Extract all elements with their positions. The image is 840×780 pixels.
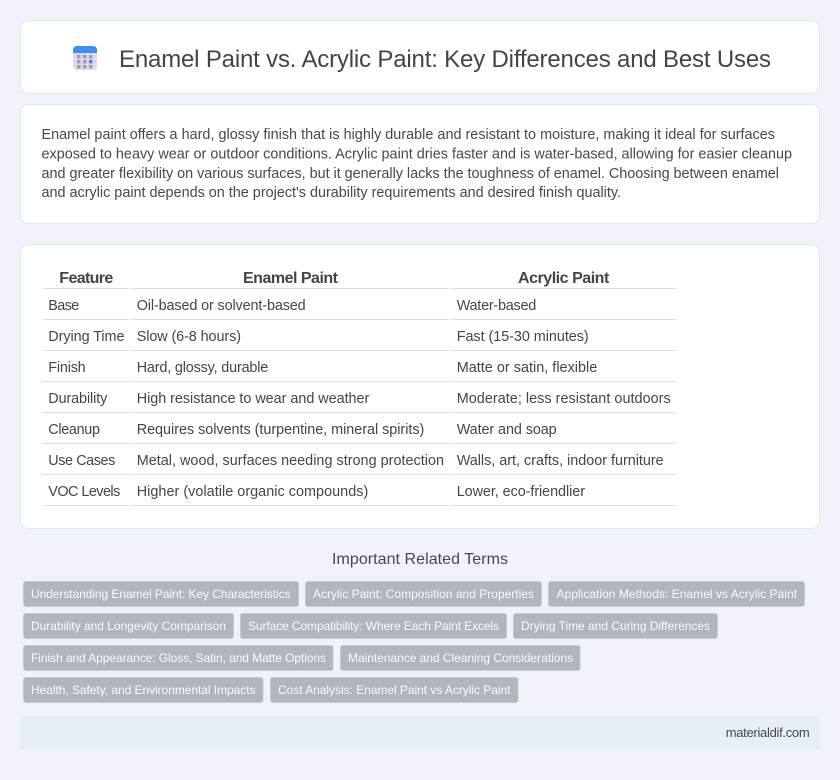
table header row: Enamel Paint — [243, 270, 339, 287]
row: VOC levels: Higher (volatile organic compounds) — [137, 484, 368, 500]
row: drying time: Slow (6-8 hours) — [137, 329, 241, 345]
chip — [24, 582, 298, 606]
panel: introduction: and acrylic paint depends on the project's durability requirements and desired finish quality. — [42, 185, 621, 201]
related term chips — [24, 582, 804, 702]
chip — [24, 678, 263, 702]
chip: Health, Safety, and Environmental Impacts — [31, 683, 256, 697]
chip: Surface Compatibility: Where Each Paint Excels — [248, 619, 499, 633]
panel: comparison table — [20, 244, 820, 528]
row: finish: Matte or satin, flexible — [457, 360, 597, 376]
row: base: Base — [48, 298, 79, 314]
row: finish: Finish — [48, 360, 86, 376]
icon: calendar — [73, 46, 97, 70]
panel: introduction: and greater flexibility on various surfaces, but it generally lacks the toughness of enamel. Choosing between enamel — [42, 166, 779, 182]
row: cleanup: Requires solvents (turpentine, mineral spirits) — [137, 422, 424, 438]
panel: introduction — [20, 104, 820, 224]
table header row — [59, 270, 610, 287]
row: cleanup: Cleanup — [48, 422, 100, 438]
table header row: Feature — [59, 270, 113, 287]
chip: Drying Time and Curing Differences — [521, 619, 710, 633]
row: use cases: Walls, art, crafts, indoor furniture — [457, 453, 664, 469]
row: use cases — [48, 453, 664, 469]
row: VOC levels: Lower, eco-friendlier — [457, 484, 585, 500]
row: drying time: Fast (15-30 minutes) — [457, 329, 589, 345]
chip: Durability and Longevity Comparison — [31, 619, 226, 633]
title: Enamel Paint vs. Acrylic Paint: Key Differences and Best Uses — [119, 46, 771, 73]
row: VOC levels: VOC Levels — [48, 484, 120, 500]
chip — [548, 582, 804, 606]
chip — [24, 646, 333, 670]
row: drying time: Drying Time — [48, 329, 124, 345]
row: durability: High resistance to wear and weather — [137, 391, 370, 407]
row: base: Water-based — [457, 298, 536, 314]
row: finish — [48, 360, 597, 376]
footer bar — [20, 716, 820, 750]
chip — [340, 646, 580, 670]
row: VOC levels — [48, 484, 585, 500]
row: drying time — [48, 329, 589, 345]
row: base — [48, 298, 536, 314]
row: cleanup: Water and soap — [457, 422, 557, 438]
panel: introduction: exposed to heavy wear or outdoor conditions. Acrylic paint dries faster and is water-based, allowing for easier cleanup — [42, 146, 792, 162]
row: durability: Durability — [48, 391, 108, 407]
row: use cases: Use Cases — [48, 453, 115, 469]
chip: Application Methods: Enamel vs Acrylic Paint — [556, 587, 798, 601]
chip — [270, 678, 518, 702]
chip: Maintenance and Cleaning Considerations — [348, 651, 573, 665]
row: durability — [48, 391, 671, 407]
row: finish: Hard, glossy, durable — [137, 360, 268, 376]
table header row: Acrylic Paint — [518, 270, 610, 287]
chip: Acrylic Paint: Composition and Properties — [313, 587, 534, 601]
row: base: Oil-based or solvent-based — [137, 298, 306, 314]
header panel — [20, 20, 820, 94]
row: cleanup — [48, 422, 557, 438]
chip: Understanding Enamel Paint: Key Characteristics — [31, 587, 290, 601]
footer bar: materialdif.com — [726, 725, 810, 740]
chip — [514, 614, 718, 638]
chip: Finish and Appearance: Gloss, Satin, and Matte Options — [31, 651, 326, 665]
chip — [306, 582, 542, 606]
heading: related terms: Important Related Terms — [332, 551, 508, 568]
panel: introduction: Enamel paint offers a hard, glossy finish that is highly durable and resistant to moisture, making it ideal for surfaces — [42, 127, 775, 143]
chip — [24, 614, 234, 638]
chip: Cost Analysis: Enamel Paint vs Acrylic Paint — [278, 683, 511, 697]
row: durability: Moderate; less resistant outdoors — [457, 391, 671, 407]
row: use cases: Metal, wood, surfaces needing strong protection — [137, 453, 444, 469]
chip — [240, 614, 506, 638]
